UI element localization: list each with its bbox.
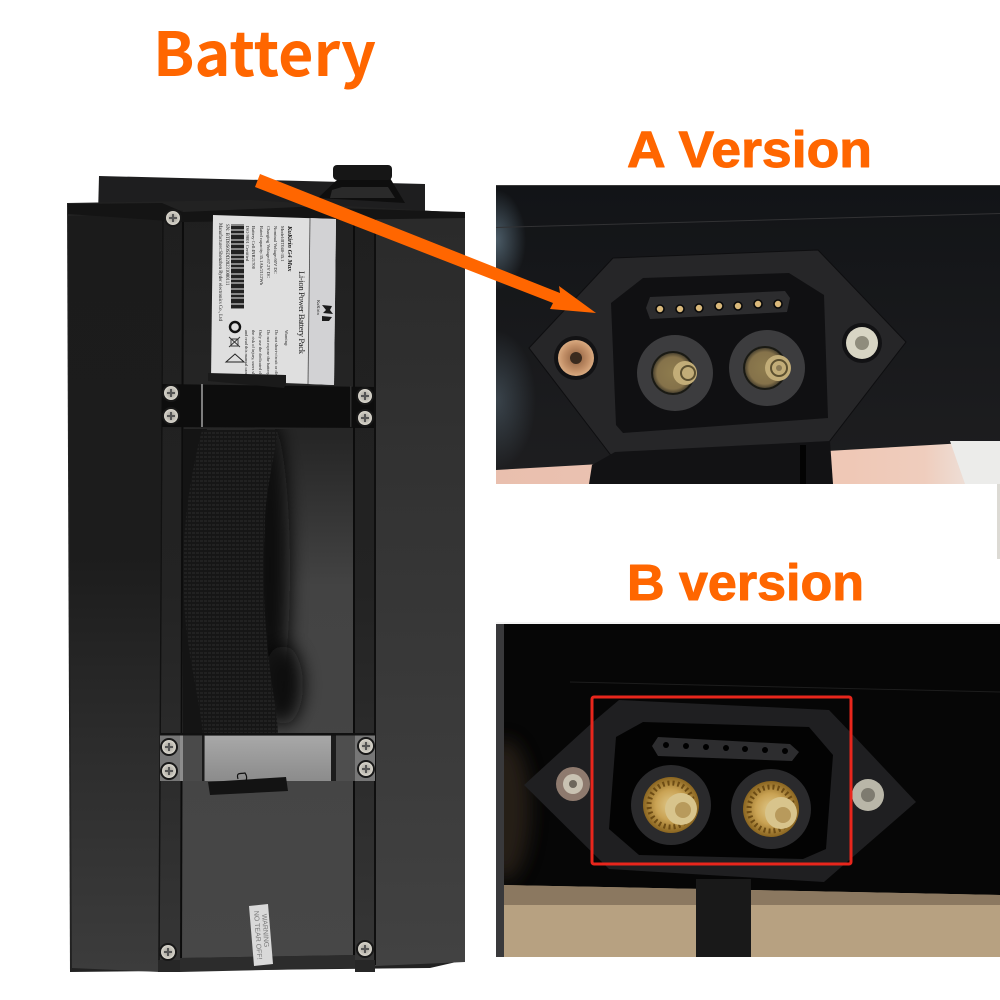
hinge <box>589 441 833 484</box>
hand below battery <box>496 444 965 484</box>
arrow: battery to A version connector <box>255 174 596 313</box>
photo: B version connector <box>480 622 1000 957</box>
left power terminal <box>631 765 711 845</box>
red highlight box <box>592 697 851 864</box>
label text <box>217 223 321 388</box>
label text: KuKirin <box>316 300 321 315</box>
webbing strap <box>183 430 278 735</box>
connector recess <box>611 273 828 433</box>
left screw <box>556 767 590 801</box>
warning sticker: NO TEAR OFF! <box>252 911 262 960</box>
label text: Manufacturer:Shenzhen Ryder electronics Co., Ltd <box>217 223 222 321</box>
screws <box>160 210 374 960</box>
right silver screw <box>842 323 882 363</box>
right power terminal <box>731 769 811 849</box>
battery pack photo <box>67 165 465 972</box>
left power terminal <box>637 335 713 411</box>
heading: A Version: A Version <box>627 121 872 178</box>
product label <box>211 215 336 388</box>
strap lower tab <box>208 777 288 795</box>
edge fragment <box>997 484 1000 559</box>
warning sticker <box>249 904 273 966</box>
pin bar <box>646 291 790 319</box>
label text: Li-ion Power Battery Pack <box>297 271 307 355</box>
strap shadow <box>183 420 303 735</box>
label text: and read this manual carefully <box>244 330 249 384</box>
right screw <box>852 779 884 811</box>
photo: A version connector <box>456 185 1000 484</box>
battery top cap and latch <box>98 165 425 220</box>
strap below connector <box>696 879 751 957</box>
label text: Battery Cell:INR21700 <box>251 226 256 270</box>
heading: B version: B version <box>627 554 864 611</box>
label text: the risk of injury, users should <box>250 330 256 384</box>
strap loose thread <box>237 773 247 781</box>
barcode <box>231 224 244 309</box>
icon: crossed bin <box>229 337 240 347</box>
icon: recycling <box>230 322 240 332</box>
label text: Do not short-circuit or dismantle <box>274 330 279 388</box>
title: Battery: Battery <box>153 5 376 94</box>
icon: warning triangle <box>226 354 244 362</box>
lower bracket <box>160 733 375 781</box>
warning sticker: WARNING <box>260 914 269 948</box>
right power terminal <box>729 330 805 406</box>
label text: KuKirin G4 Max <box>286 225 293 272</box>
label text: Model:BT048-35.1 <box>280 226 285 262</box>
label text: Only use the dedicated charger <box>258 330 263 385</box>
label text: Warning: <box>284 330 289 346</box>
connector recess <box>609 722 833 859</box>
upper bracket <box>162 384 374 428</box>
connector mounting plate <box>529 250 906 458</box>
label text: Do not expose the battery to fire <box>266 330 271 387</box>
pin bar <box>652 737 799 761</box>
label text: SN: BTD8S0SDD20231000111 <box>224 224 229 286</box>
label text: ISO 9001 Certified <box>245 226 250 262</box>
battery main body <box>67 200 465 972</box>
label text: Nominal Voltage:60V DC <box>273 226 278 274</box>
strap folded end at upper bracket <box>208 373 286 388</box>
connector mounting plate <box>524 700 916 882</box>
label text: Charging Voltage:67.2V DC <box>266 226 271 278</box>
left copper screw <box>554 336 598 380</box>
icon: brand logo <box>322 305 333 321</box>
label text: Rated capacity:35.1Ah/2112Wh <box>259 226 264 286</box>
